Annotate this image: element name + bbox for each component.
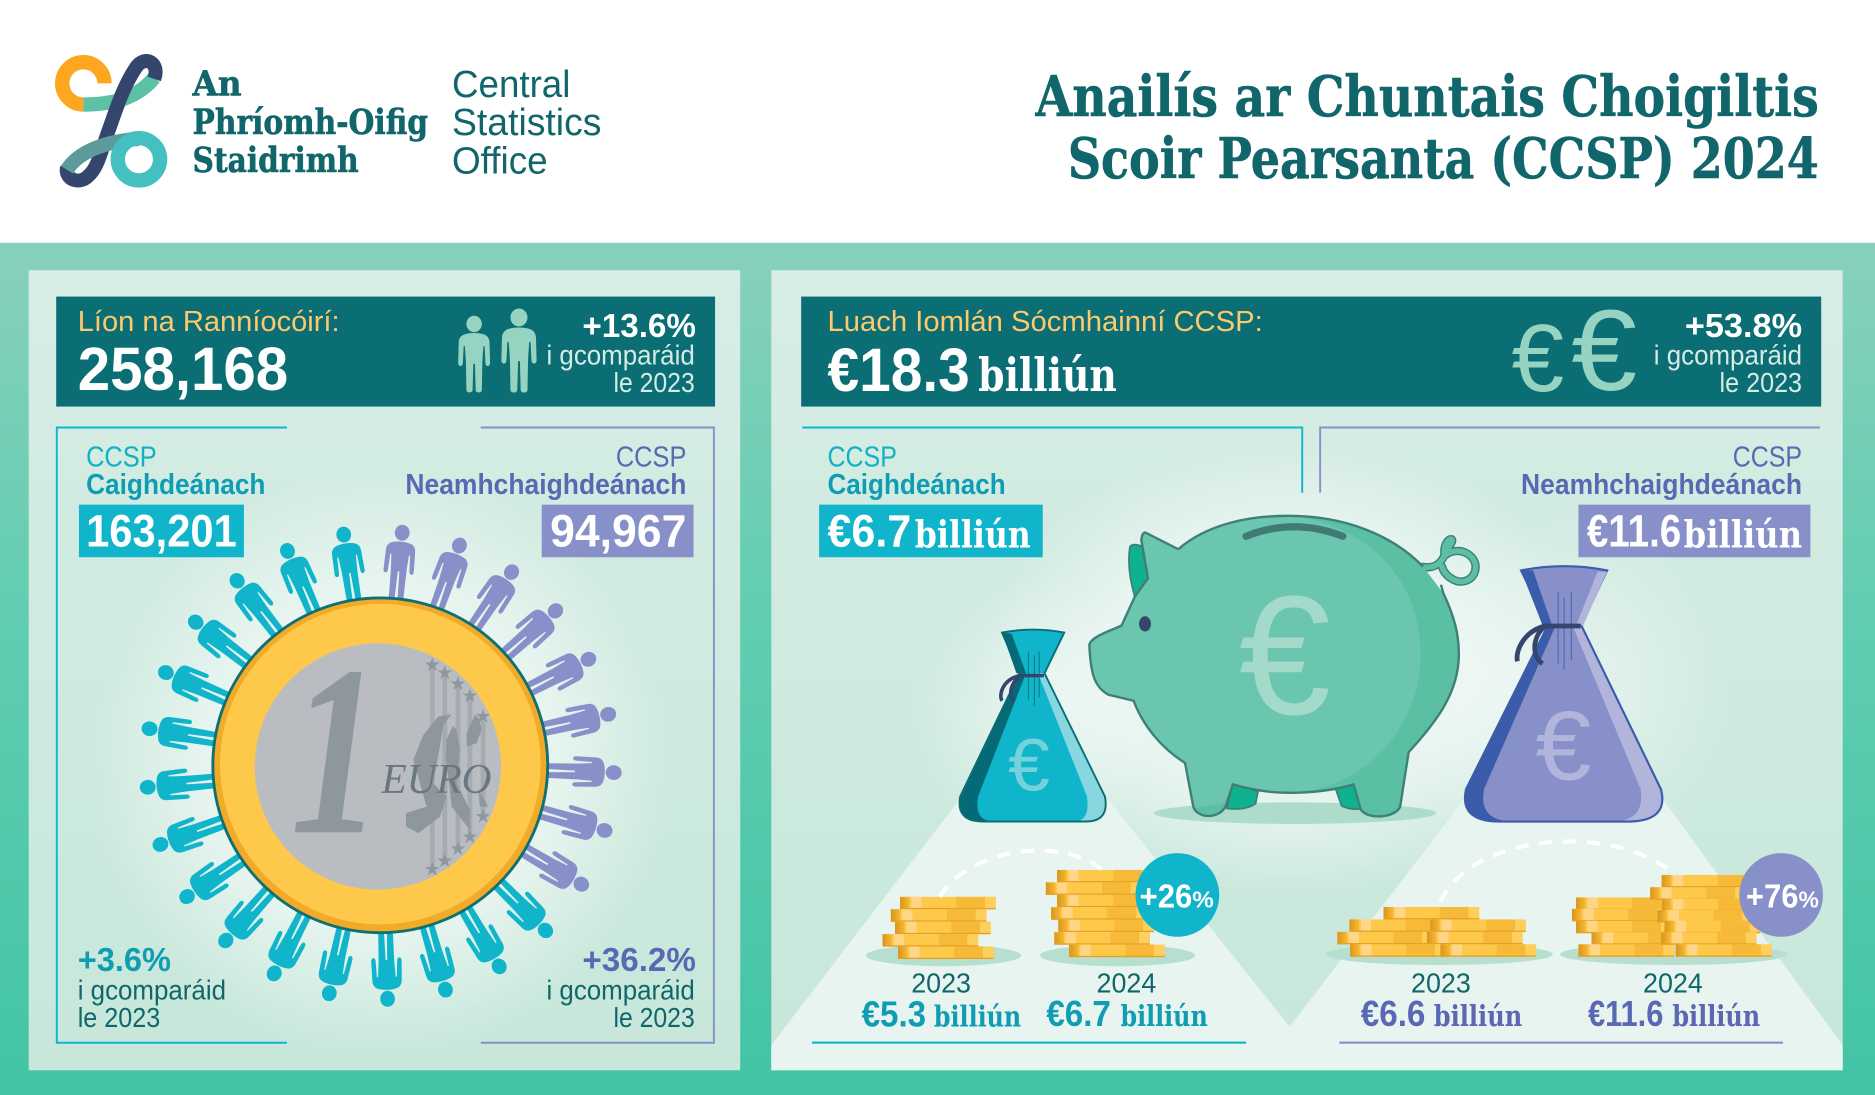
baseline: standard bbox=[812, 1042, 1246, 1044]
change: non-standard: i gcomparáid bbox=[546, 975, 695, 1006]
values: standard 2024: €6.7 bbox=[1046, 994, 1111, 1034]
contributors header bar: 258,168 bbox=[78, 335, 288, 403]
bracket: non-standard value bbox=[1320, 428, 1820, 493]
contributors header bar bbox=[56, 297, 715, 407]
assets header bar: +53.8% bbox=[1685, 308, 1802, 345]
bracket: non-standard bbox=[481, 428, 714, 1043]
dashed arrow: non-standard bbox=[1440, 841, 1674, 902]
coin stacks: standard 2023 bbox=[866, 897, 1021, 966]
values: standard 2024: 2024 bbox=[1097, 968, 1156, 999]
values: standard 2023: €5.3 bbox=[862, 995, 926, 1035]
label: non-standard value bbox=[1521, 441, 1810, 557]
panel: contributors bbox=[29, 270, 740, 1070]
coin stacks: non-standard 2024 bbox=[1560, 875, 1787, 965]
assets header bar: €18.3 bbox=[827, 336, 970, 404]
euro coin: ★ bbox=[475, 706, 492, 727]
values: non-standard 2023: billiún bbox=[1434, 999, 1522, 1033]
contributors header bar: le 2023 bbox=[613, 367, 695, 398]
euro coin: ★ bbox=[475, 807, 492, 828]
piggy bank bbox=[1076, 515, 1476, 825]
badge: +26% bbox=[1136, 853, 1219, 937]
euro coin: ★ bbox=[436, 663, 453, 684]
euro coin: ★ bbox=[449, 839, 467, 860]
people ring: non-standard bbox=[381, 523, 622, 901]
logo text: Irish: Staidrimh bbox=[193, 140, 359, 181]
money bag: standard: € bbox=[1008, 723, 1050, 806]
people ring: standard bbox=[138, 524, 562, 1007]
label: standard value: billiún bbox=[915, 513, 1031, 557]
coin stacks: standard 2024 bbox=[1040, 870, 1195, 966]
header background bbox=[0, 0, 1875, 244]
values: non-standard 2024: billiún bbox=[1672, 999, 1760, 1033]
change: non-standard: +36.2% bbox=[582, 942, 696, 979]
euro coin: ★ bbox=[424, 859, 441, 880]
values: standard 2023: billiún bbox=[934, 1000, 1021, 1034]
badge: +76%: +76 bbox=[1746, 879, 1798, 916]
coin stacks: non-standard 2023 bbox=[1326, 907, 1553, 965]
assets header bar: Luach Iomlán Sócmhainní CCSP: bbox=[827, 306, 1263, 338]
euro coin: ★ bbox=[461, 686, 479, 707]
label: standard value bbox=[819, 441, 1043, 557]
euro coin: 1 bbox=[291, 616, 381, 885]
label: standard value: €6.7 bbox=[827, 505, 911, 556]
piggy bank: € bbox=[1239, 560, 1331, 750]
euro coin: ★ bbox=[436, 851, 453, 872]
values: non-standard 2023: €6.6 bbox=[1361, 994, 1425, 1034]
values: standard 2024 bbox=[1046, 968, 1208, 1034]
values: standard 2023: 2023 bbox=[911, 968, 971, 999]
euro coin: ★ bbox=[449, 674, 467, 695]
pig glow bbox=[978, 442, 1600, 897]
logo mark bbox=[62, 61, 160, 181]
coin glow bbox=[87, 472, 673, 1058]
change: standard: le 2023 bbox=[78, 1002, 160, 1033]
label: non-standard value: billiún bbox=[1684, 513, 1802, 557]
money bag: standard bbox=[960, 630, 1106, 822]
contributors header bar: +13.6% bbox=[582, 308, 696, 345]
assets header bar: i gcomparáid bbox=[1654, 340, 1802, 371]
bracket: standard bbox=[57, 428, 287, 1043]
assets header bar: billiún bbox=[978, 348, 1117, 402]
values: standard 2024: billiún bbox=[1120, 999, 1208, 1033]
contributors header bar: Líon na Ranníocóirí: bbox=[78, 306, 340, 338]
background band bbox=[0, 243, 1875, 1095]
values: non-standard 2024: €11.6 bbox=[1588, 994, 1663, 1034]
label: standard value: Caighdeánach bbox=[827, 469, 1006, 501]
logo text: English: Statistics bbox=[452, 101, 601, 144]
values: standard 2023 bbox=[862, 968, 1021, 1035]
logo text: Irish: An bbox=[192, 64, 242, 105]
euro coin: EURO bbox=[380, 757, 491, 803]
euro coin: ★ bbox=[461, 827, 479, 848]
label: standard PRSA bbox=[79, 441, 265, 557]
right bag glow bbox=[1391, 514, 1737, 873]
label: standard PRSA: CCSP bbox=[86, 441, 157, 473]
badge: +76% bbox=[1739, 853, 1823, 937]
label: standard value: CCSP bbox=[827, 441, 897, 473]
money bag: non-standard bbox=[1465, 566, 1662, 822]
assets header bar: le 2023 bbox=[1720, 367, 1802, 398]
logo text: Irish bbox=[192, 64, 428, 181]
label: non-standard PRSA: 94,967 bbox=[550, 505, 686, 556]
logo text: English bbox=[452, 63, 601, 182]
values: non-standard 2023 bbox=[1361, 968, 1522, 1034]
change: standard bbox=[78, 942, 226, 1033]
label: standard PRSA: Caighdeánach bbox=[86, 469, 265, 501]
change: standard: +3.6% bbox=[78, 942, 171, 979]
bracket: standard value bbox=[802, 428, 1302, 493]
assets header bar bbox=[801, 287, 1821, 415]
change: non-standard bbox=[546, 942, 696, 1033]
dashed arrow: standard bbox=[940, 850, 1104, 897]
label: standard PRSA: 163,201 bbox=[86, 505, 237, 556]
label: non-standard value: €11.6 bbox=[1587, 505, 1681, 556]
badge: +76%: % bbox=[1798, 887, 1819, 913]
euro coin: ★ bbox=[424, 655, 441, 676]
baseline: non-standard bbox=[1339, 1042, 1783, 1044]
light floor cones bbox=[771, 800, 1843, 1070]
title bbox=[1035, 64, 1819, 192]
label: non-standard PRSA: CCSP bbox=[616, 441, 686, 473]
logo text: English: Office bbox=[452, 139, 548, 182]
label: non-standard PRSA: Neamhchaighdeánach bbox=[405, 469, 686, 501]
label: non-standard PRSA bbox=[405, 441, 694, 557]
panel: assets bbox=[771, 270, 1843, 1070]
values: non-standard 2024 bbox=[1588, 968, 1760, 1034]
assets header bar: € bbox=[1511, 305, 1564, 412]
euro coin bbox=[213, 598, 548, 933]
contributors header bar: i gcomparáid bbox=[546, 340, 695, 371]
values: non-standard 2023: 2023 bbox=[1411, 968, 1471, 999]
pig shadow bbox=[1154, 802, 1436, 824]
left bag glow bbox=[908, 574, 1159, 861]
logo text: Irish: Phríomh-Oifig bbox=[193, 102, 428, 143]
badge: +26%: % bbox=[1192, 887, 1214, 913]
change: non-standard: le 2023 bbox=[613, 1002, 695, 1033]
change: standard: i gcomparáid bbox=[78, 975, 226, 1006]
values: non-standard 2024: 2024 bbox=[1643, 968, 1703, 999]
money bag: non-standard: € bbox=[1535, 691, 1592, 801]
logo text: English: Central bbox=[452, 63, 570, 106]
label: non-standard value: CCSP bbox=[1733, 441, 1802, 473]
assets header bar: € bbox=[1571, 287, 1637, 415]
badge: +26%: +26 bbox=[1140, 879, 1192, 916]
label: non-standard value: Neamhchaighdeánach bbox=[1521, 469, 1802, 501]
